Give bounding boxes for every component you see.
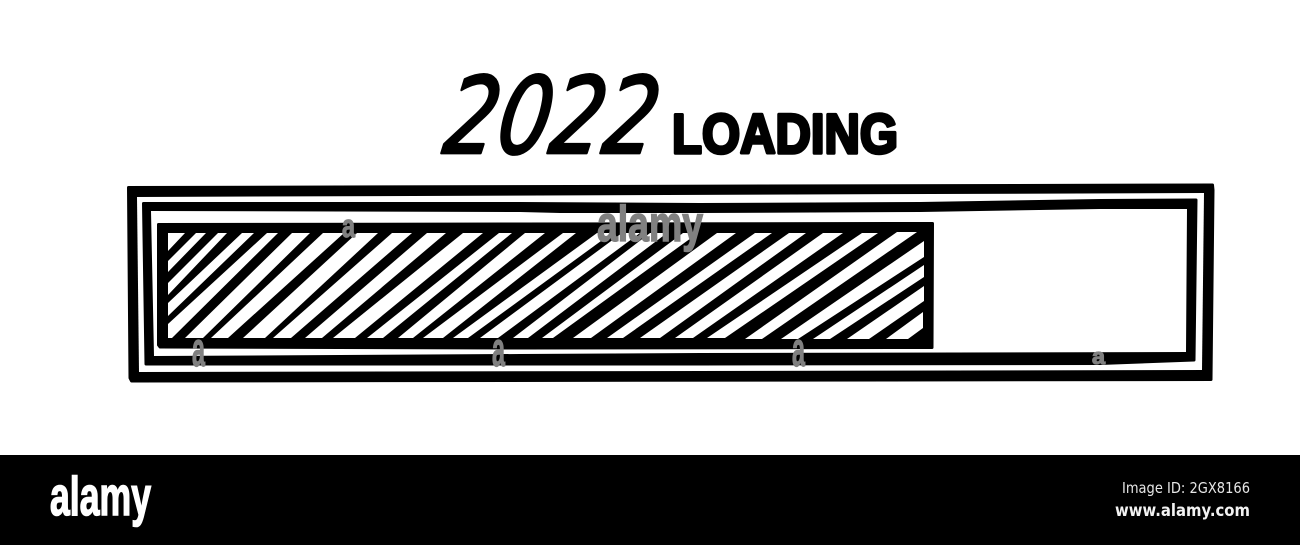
progress bar	[128, 185, 1213, 381]
footer image id: Image ID: 2GX8166	[1122, 479, 1250, 497]
progress fill	[158, 224, 932, 348]
outer frame	[128, 185, 1213, 381]
footer band	[0, 455, 1300, 545]
footer logo: alamy: alamy	[50, 465, 151, 527]
diagonal hatch stripes	[168, 232, 924, 339]
watermark: small letters: a	[792, 324, 805, 377]
title: 2022 LOADING	[437, 56, 898, 179]
fill background	[158, 224, 932, 348]
footer url: www.alamy.com	[1115, 501, 1250, 521]
footer background	[0, 455, 1300, 545]
heading: LOADING: LOADING	[672, 102, 898, 165]
watermark: small letters: a	[342, 208, 355, 244]
watermark: small letters: a	[1092, 344, 1106, 369]
watermark: alamy centre: alamy	[597, 196, 703, 252]
middle frame	[144, 200, 1196, 364]
heading: 2022: 2022	[437, 56, 668, 179]
watermark: small letters: a	[492, 324, 505, 377]
watermark: small letters: a	[192, 324, 205, 377]
watermark: small letters	[192, 208, 1106, 377]
